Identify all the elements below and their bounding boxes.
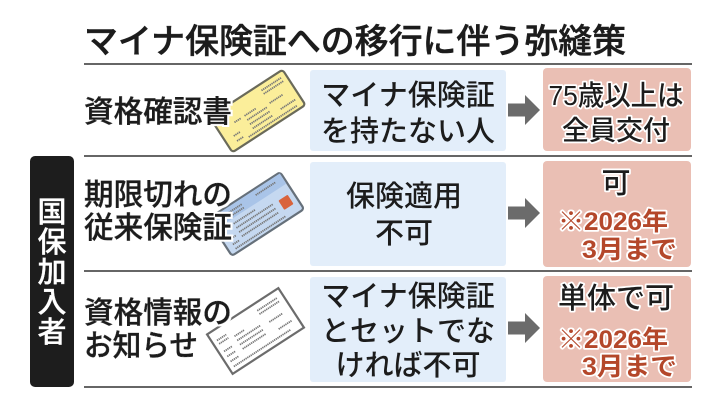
arrow — [508, 313, 540, 343]
cell: result: 3月まで — [582, 353, 677, 381]
row label: 従来保険証 — [84, 212, 232, 245]
cell: condition: とセットでな — [321, 316, 495, 348]
cell: condition — [310, 70, 506, 151]
panel: 国保加入者 side label — [30, 156, 74, 387]
cell: condition: 不可 — [375, 218, 433, 250]
row label: 資格情報の — [84, 297, 232, 330]
panel: 国保加入者 side label: 国 — [37, 197, 67, 229]
row label: 期限切れの — [84, 179, 232, 212]
arrow — [508, 95, 540, 125]
panel: 国保加入者 side label: 加 — [37, 257, 67, 289]
icon: white notice card — [207, 288, 304, 374]
cell: condition: を持たない人 — [321, 115, 495, 148]
cell: condition: マイナ保険証 — [321, 280, 495, 313]
panel: 国保加入者 side label: 者 — [37, 316, 67, 349]
cell: result: 3月まで — [582, 236, 677, 264]
row label: お知らせ — [84, 330, 198, 363]
panel: row 1 資格確認書 — [84, 68, 691, 152]
row label — [84, 179, 232, 245]
cell: condition — [310, 277, 506, 382]
cell: result — [543, 161, 691, 267]
cell: result — [543, 68, 691, 151]
cell: condition: ければ不可 — [335, 349, 481, 382]
row label: 資格確認書 — [84, 96, 232, 129]
icon: blue card — [208, 172, 304, 256]
arrow — [508, 198, 540, 228]
panel: 国保加入者 side label: 保 — [37, 226, 67, 259]
cell: result: 全員交付 — [562, 116, 670, 146]
cell: condition: 保険適用 — [346, 180, 462, 213]
cell: result: 単体で可 — [558, 282, 674, 315]
panel: row 2 期限切れの従来保険証 — [84, 161, 691, 267]
panel: 国保加入者 side label: 入 — [37, 287, 67, 319]
cell: result — [543, 276, 691, 382]
cell: result: ※2026年 — [558, 326, 668, 354]
cell: result: ※2026年 — [558, 208, 668, 236]
cell: result: 75歳以上は — [548, 80, 684, 111]
cell: result: 可 — [601, 168, 631, 200]
panel: row 3 資格情報のお知らせ — [84, 276, 691, 382]
cell: condition — [310, 162, 506, 266]
row label — [84, 297, 232, 363]
icon: yellow card — [210, 70, 305, 152]
cell: condition: マイナ保険証 — [321, 79, 495, 112]
title: マイナ保険証への移行に伴う弥縫策 — [84, 23, 626, 61]
